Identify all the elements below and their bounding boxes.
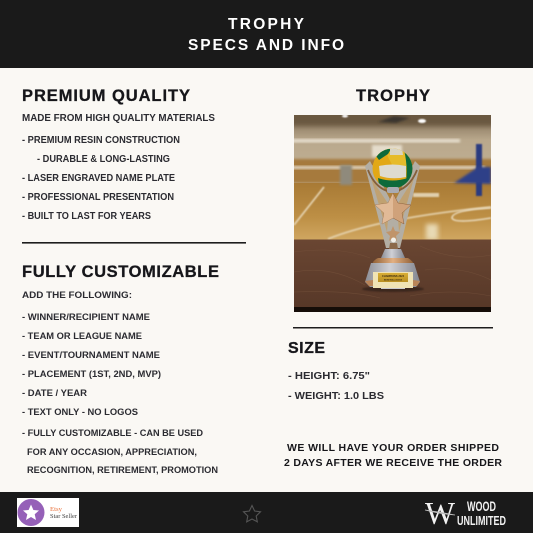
name plate: CHAMPIONS 2024: [382, 275, 405, 278]
gym background: [290, 112, 495, 240]
panel: size: [288, 340, 384, 402]
trophy base: [365, 263, 420, 287]
list: quality features: - LASER ENGRAVED NAME PLATE: [22, 173, 175, 184]
header title: TROPHY: [228, 16, 305, 33]
name plate: [373, 272, 413, 288]
list: customization options: - DATE / YEAR: [22, 388, 87, 399]
small bronze star: [386, 226, 400, 241]
list: quality features: [22, 135, 180, 222]
icon: purple badge with star: [18, 499, 44, 526]
text: customization note: RECOGNITION, RETIREMENT, PROMOTION: [27, 465, 218, 476]
text: materials intro: MADE FROM HIGH QUALITY MATERIALS: [22, 113, 215, 124]
shipping note: [284, 442, 502, 469]
list: customization options: - PLACEMENT (1ST, 2ND, MVP): [22, 369, 161, 380]
spec: height: - HEIGHT: 6.75": [288, 370, 370, 382]
shipping note: 2 DAYS AFTER WE RECEIVE THE ORDER: [284, 457, 502, 469]
product photo: volleyball trophy in gym: [290, 112, 495, 312]
volleyball: [372, 148, 412, 188]
text: customization note: FOR ANY OCCASION, APPRECIATION,: [27, 447, 197, 458]
heading: size: SIZE: [288, 340, 325, 357]
text: customization note: - FULLY CUSTOMIZABLE - CAN BE USED: [22, 428, 203, 439]
list: quality features: - BUILT TO LAST FOR YEARS: [22, 211, 151, 222]
list: customization options: - WINNER/RECIPIENT NAME: [22, 312, 150, 323]
logo: wood unlimited: UNLIMITED: [457, 513, 506, 528]
logo: wood unlimited: [425, 495, 506, 531]
spec: weight: - WEIGHT: 1.0 LBS: [288, 390, 384, 402]
panel: premium quality: [22, 87, 215, 222]
header title: [188, 16, 344, 54]
shadow: [362, 286, 424, 292]
logo: wood unlimited: W: [425, 495, 456, 531]
panel: fully customizable: [22, 263, 219, 476]
list: customization options: - TEXT ONLY - NO LOGOS: [22, 407, 138, 418]
logo: wood unlimited: WOOD: [467, 498, 496, 514]
heading: trophy: TROPHY: [356, 87, 430, 105]
text: add the following: ADD THE FOLLOWING:: [22, 290, 132, 301]
trophy neck: [381, 249, 405, 258]
badge: etsy star seller: [17, 498, 79, 527]
header band: [0, 0, 533, 68]
heading: premium quality: PREMIUM QUALITY: [22, 87, 190, 105]
text: customization note: [22, 428, 218, 476]
collar: [387, 187, 399, 193]
bronze ring: [372, 258, 413, 263]
heading: fully customizable: FULLY CUSTOMIZABLE: [22, 263, 219, 281]
footer band: [0, 492, 533, 533]
badge: etsy star seller: Etsy: [50, 506, 63, 513]
badge: etsy star seller: Star Seller: [50, 513, 77, 520]
name plate: BASKETBALL LEAGUE: [384, 278, 403, 282]
small ball figure: [389, 238, 398, 249]
icon: outline star: [244, 506, 260, 522]
wooden table: [294, 240, 491, 312]
list: quality features: - DURABLE & LONG-LASTING: [37, 154, 170, 165]
header title: SPECS AND INFO: [188, 37, 344, 54]
list: quality features: - PROFESSIONAL PRESENTATION: [22, 192, 174, 203]
trophy: [362, 148, 424, 292]
list: quality features: - PREMIUM RESIN CONSTRUCTION: [22, 135, 180, 146]
shipping note: WE WILL HAVE YOUR ORDER SHIPPED: [287, 442, 499, 454]
list: customization options: - EVENT/TOURNAMENT NAME: [22, 350, 160, 361]
list: customization options: [22, 312, 161, 418]
list: customization options: - TEAM OR LEAGUE NAME: [22, 331, 142, 342]
large bronze star: [375, 193, 411, 224]
trophy V frame: [365, 161, 420, 248]
